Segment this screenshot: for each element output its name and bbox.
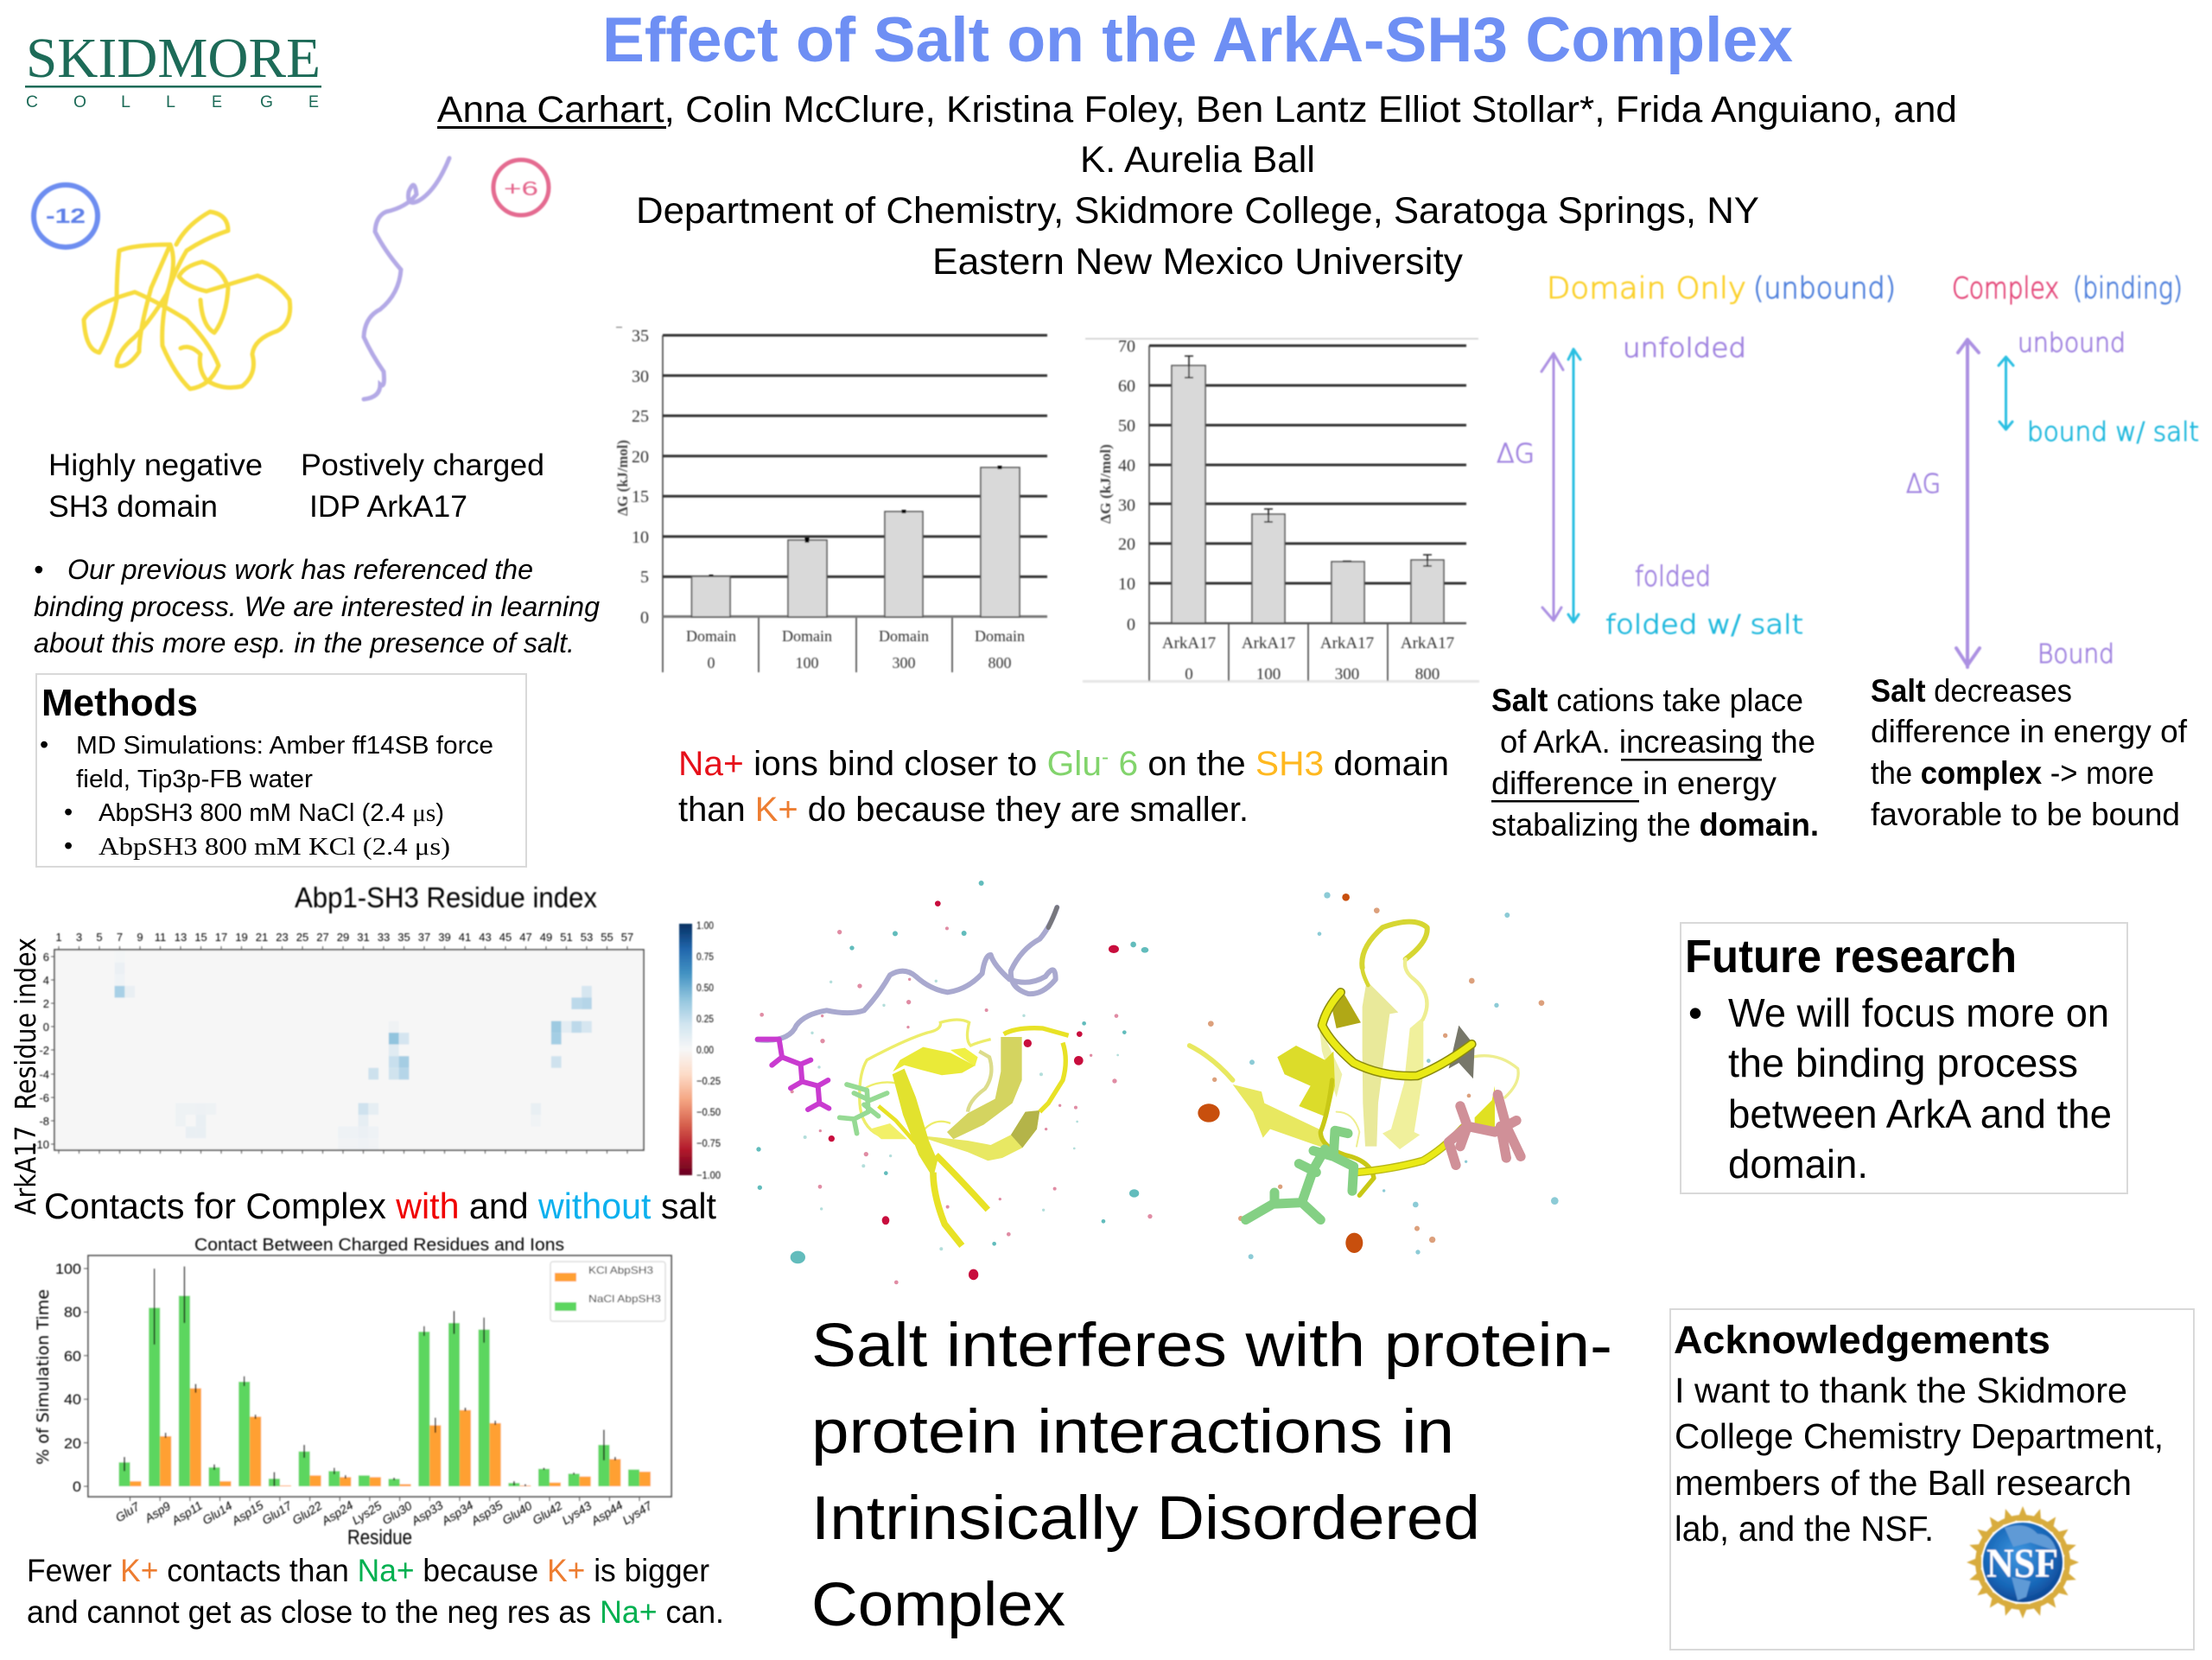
- x tick labels: Asp35: [467, 1498, 505, 1529]
- icon: -12 charge: [34, 185, 98, 247]
- heatmap x labels: 27: [316, 931, 329, 944]
- callout: take-home message: Complex: [811, 1571, 1065, 1639]
- heatmap x labels: 33: [378, 931, 390, 944]
- heatmap x labels: 37: [418, 931, 430, 944]
- x tick labels: Lys47: [620, 1498, 655, 1527]
- future research text: the binding process: [1728, 1040, 2078, 1085]
- authors and affiliations: Department of Chemistry, Skidmore College, Saratoga Springs, NY: [636, 190, 1759, 232]
- colorbar: 0.00: [696, 1044, 714, 1056]
- ribbon: SH3 domain: [860, 1020, 1069, 1246]
- label: bound with salt: bound w/ salt: [2027, 417, 2199, 448]
- heading: methods: Methods: [41, 682, 198, 724]
- arrow: delta G complex: [1956, 340, 1980, 667]
- x labels: 300: [892, 654, 916, 671]
- y tick labels: 50: [1118, 417, 1135, 436]
- callout: take-home message: protein interactions in: [811, 1398, 1454, 1466]
- x labels: ArkA17: [1401, 634, 1454, 652]
- heading: complex: [1952, 271, 2183, 306]
- y tick labels: 25: [632, 407, 649, 426]
- logo: Skidmore College: O: [73, 93, 86, 111]
- x labels: ArkA17: [1242, 634, 1295, 652]
- x labels: ArkA17: [1320, 634, 1374, 652]
- intro text: •: [34, 554, 43, 585]
- heatmap x labels: 19: [235, 931, 248, 944]
- heatmap x labels: 43: [479, 931, 492, 944]
- x labels: 800: [988, 654, 1011, 671]
- acknowledgements text: lab, and the NSF.: [1675, 1509, 1934, 1549]
- heatmap y labels: [33, 951, 49, 1151]
- diagram: complex energy: [1906, 271, 2199, 670]
- protein render: NaCl complex: [756, 881, 1153, 1284]
- text: salt domain: difference in energy: [1491, 766, 1777, 801]
- heatmap x labels: 9: [137, 931, 143, 944]
- label: bound: Bound: [2037, 639, 2114, 670]
- x tick labels: Glu22: [289, 1498, 325, 1527]
- protein render: KCl complex: [1190, 892, 1559, 1259]
- x labels: Domain: [879, 627, 929, 645]
- text: salt complex: the complex -> more: [1871, 755, 2154, 791]
- methods list: •: [64, 798, 73, 826]
- colorbar: 0.75: [696, 951, 714, 963]
- x tick labels: Glu30: [379, 1498, 415, 1527]
- heatmap x labels: 49: [540, 931, 552, 944]
- x labels: 0: [707, 654, 715, 671]
- x tick labels: Asp24: [318, 1498, 356, 1529]
- heatmap y labels: 2: [43, 997, 49, 1010]
- heatmap: contact map: [33, 881, 644, 1154]
- text: ion binding: 6: [1109, 745, 1138, 783]
- label: SH3 domain: [48, 448, 263, 524]
- methods list: AbpSH3 800 mM NaCl (2.4 μs): [99, 799, 444, 827]
- colorbar: −0.50: [696, 1106, 721, 1118]
- colorbar: −0.75: [696, 1137, 721, 1149]
- x labels: 0: [1185, 665, 1193, 684]
- colorbar: −0.25: [696, 1075, 721, 1087]
- colorbar: [679, 919, 721, 1181]
- logo: Skidmore College: SKIDMORE: [26, 27, 321, 90]
- label: folded: folded: [1635, 560, 1711, 593]
- sticks: green residue: [840, 1084, 887, 1134]
- heatmap x labels: 55: [601, 931, 613, 944]
- x tick labels: Glu14: [200, 1498, 235, 1527]
- bars: [1172, 366, 1444, 623]
- label: ArkA17 IDP: [301, 448, 544, 524]
- diagram: domain only energy: [1497, 271, 1896, 640]
- methods list: field, Tip3p-FB water: [76, 766, 313, 793]
- intro text: binding process. We are interested in learning: [34, 591, 600, 622]
- x tick labels: Asp9: [142, 1498, 173, 1526]
- heatmap x labels: 1: [55, 931, 62, 944]
- future research text: We will focus more on: [1728, 990, 2109, 1035]
- text: salt complex: [1871, 673, 2188, 832]
- y tick labels: 15: [632, 487, 649, 506]
- icon: +6 charge: [493, 160, 549, 215]
- text: ion binding: [678, 745, 1449, 829]
- y tick labels: 80: [64, 1304, 81, 1320]
- heading: domain only: Domain Only: [1547, 271, 1746, 306]
- y tick labels: 20: [632, 448, 649, 467]
- heading: future research: Future research: [1685, 931, 2017, 983]
- heatmap x labels: 3: [76, 931, 82, 944]
- methods list: MD Simulations: Amber ff14SB force: [76, 732, 493, 760]
- acknowledgements text: [1675, 1371, 2164, 1549]
- label: unbound: unbound: [2018, 328, 2126, 359]
- future research text: domain.: [1728, 1142, 1868, 1186]
- heatmap y labels: -4: [39, 1068, 49, 1081]
- y tick labels: 70: [1118, 337, 1135, 356]
- callout: take-home message: Intrinsically Disordered: [811, 1485, 1480, 1553]
- y tick labels: 20: [64, 1435, 81, 1452]
- heading: acknowledgements: Acknowledgements: [1674, 1318, 2050, 1362]
- heatmap x labels: 25: [296, 931, 308, 944]
- squiggle: yellow SH3: [84, 212, 290, 389]
- heatmap x labels: 23: [276, 931, 289, 944]
- x tick labels: Lys43: [559, 1498, 594, 1527]
- x labels: Domain: [686, 627, 736, 645]
- x axis title: Residue: [347, 1526, 412, 1549]
- logo: Skidmore College: L: [121, 93, 130, 111]
- arrow: delta G complex with salt: [1999, 357, 2013, 429]
- panel: methods: [36, 674, 526, 867]
- squiggle: purple ArkA17: [364, 158, 449, 399]
- y axis title: ΔG (kJ/mol): [1097, 444, 1114, 524]
- y tick labels: 40: [1118, 456, 1135, 475]
- heatmap x labels: 57: [621, 931, 633, 944]
- bar chart: contacts between residues and ions: [34, 1236, 671, 1549]
- intro text: Our previous work has referenced the: [67, 554, 533, 585]
- x tick labels: Asp34: [438, 1498, 476, 1529]
- heatmap y labels: 6: [43, 951, 49, 964]
- intro text: about this more esp. in the presence of salt.: [34, 627, 575, 658]
- y tick labels: 10: [1118, 575, 1135, 594]
- caption: contacts: Contacts for Complex with and without salt: [44, 1186, 716, 1226]
- arrow: delta G domain: [1541, 353, 1563, 620]
- heatmap x labels: 45: [499, 931, 512, 944]
- x tick labels: Lys25: [349, 1498, 385, 1527]
- future research text: •: [1688, 990, 1702, 1035]
- legend: NaCl AbpSH3: [588, 1293, 661, 1305]
- text: salt complex: Salt decreases: [1871, 673, 2072, 709]
- heatmap x labels: 51: [560, 931, 573, 944]
- heatmap y labels: -8: [39, 1115, 49, 1128]
- logo: Skidmore College: L: [166, 93, 175, 111]
- x tick labels: Glu17: [259, 1498, 295, 1527]
- heatmap x labels: 15: [194, 931, 207, 944]
- x labels: 100: [1256, 665, 1281, 684]
- heatmap x labels: 13: [175, 931, 187, 944]
- heatmap y labels: -2: [39, 1044, 49, 1057]
- heatmap x labels: [55, 931, 633, 944]
- acknowledgements text: members of the Ball research: [1675, 1463, 2132, 1503]
- caption: fewer K+ contacts: Fewer K+ contacts than Na+ because K+ is bigger: [27, 1553, 709, 1588]
- methods list: •: [64, 832, 73, 860]
- x labels: 300: [1335, 665, 1359, 684]
- heatmap x labels: 11: [155, 931, 166, 944]
- text: salt domain: Salt cations take place: [1491, 683, 1803, 718]
- legend: KCl AbpSH3: [588, 1264, 653, 1276]
- y tick labels: 30: [632, 367, 649, 386]
- x labels: [686, 627, 1025, 671]
- text: ion binding: -: [1102, 746, 1109, 769]
- intro text: [34, 554, 600, 658]
- heading: domain only: (unbound): [1753, 271, 1896, 306]
- methods list: [40, 731, 493, 861]
- caption: fewer K+ contacts: [27, 1553, 724, 1630]
- bars: NaCl: [119, 1296, 639, 1486]
- chart title: Contact Between Charged Residues and Ions: [194, 1236, 564, 1255]
- heatmap x labels: 5: [96, 931, 103, 944]
- legend: [550, 1262, 665, 1321]
- y axis title: ΔG (kJ/mol): [614, 440, 631, 516]
- x tick labels: Asp33: [408, 1498, 446, 1529]
- future research text: between ArkA and the: [1728, 1091, 2112, 1136]
- y tick labels: 30: [1118, 496, 1135, 515]
- y tick labels: [632, 327, 649, 627]
- y tick labels: 60: [64, 1348, 81, 1364]
- heading: complex: (binding): [2073, 271, 2183, 306]
- authors and affiliations: K. Aurelia Ball: [1080, 139, 1315, 181]
- panel: acknowledgements: [1670, 1309, 2194, 1650]
- y tick labels: 20: [1118, 535, 1135, 554]
- acknowledgements text: I want to thank the Skidmore: [1675, 1371, 2127, 1410]
- sticks: green residue: [1246, 1130, 1354, 1220]
- heatmap x labels: 35: [397, 931, 410, 944]
- methods list: AbpSH3 800 mM KCl (2.4 μs): [99, 833, 450, 861]
- illustration: SH3 domain: [34, 158, 549, 399]
- heatmap title: Abp1-SH3 Residue index: [295, 881, 597, 913]
- bars: [691, 467, 1020, 617]
- heatmap x labels: 53: [581, 931, 593, 944]
- heatmap x labels: 31: [357, 931, 370, 944]
- label: ArkA17 IDP: IDP ArkA17: [309, 490, 467, 524]
- icon: +6 charge: +6: [504, 177, 538, 200]
- ribbon: ArkA17 peptide: [758, 907, 1057, 1040]
- title: Effect of Salt on the ArkA-SH3 Complex: [602, 5, 1793, 75]
- label: SH3 domain: Highly negative: [48, 448, 263, 482]
- y tick labels: 5: [640, 568, 649, 587]
- icon: NSF logo: [1967, 1506, 2079, 1619]
- x tick labels: Glu7: [113, 1498, 143, 1524]
- heatmap x labels: 39: [438, 931, 451, 944]
- text: salt complex: favorable to be bound: [1871, 797, 2180, 832]
- y tick labels: 0: [1127, 615, 1135, 634]
- chart: domain delta G: [614, 327, 1047, 672]
- label: SH3 domain: SH3 domain: [48, 490, 218, 524]
- logo: Skidmore College: E: [212, 93, 222, 111]
- y tick labels: 10: [632, 528, 649, 547]
- heatmap y labels: -10: [33, 1138, 49, 1151]
- panel: future research: [1681, 923, 2127, 1193]
- text: ion binding: on the SH3 domain: [1147, 745, 1446, 783]
- authors and affiliations: [437, 89, 1957, 283]
- y tick labels: [1118, 337, 1135, 634]
- text: salt domain: [1491, 683, 1819, 843]
- heatmap x labels: 47: [519, 931, 532, 944]
- authors and affiliations: Eastern New Mexico University: [932, 241, 1464, 283]
- caption: fewer K+ contacts: and cannot get as close to the neg res as Na+ can.: [27, 1594, 724, 1630]
- x labels: ArkA17: [1162, 634, 1216, 652]
- heatmap y axis title: ArkA17 Residue index: [9, 938, 42, 1215]
- x labels: [1162, 634, 1454, 684]
- x tick labels: Asp44: [588, 1498, 626, 1529]
- callout: take-home message: [811, 1312, 1612, 1639]
- heatmap cells: [115, 951, 592, 1150]
- heading: complex: Complex: [1952, 271, 2059, 306]
- colorbar: 0.50: [696, 982, 714, 994]
- x tick labels: [113, 1498, 655, 1529]
- label: unfolded: unfolded: [1623, 334, 1746, 364]
- icon: -12 charge: -12: [46, 205, 86, 228]
- methods list: •: [40, 731, 48, 759]
- colorbar: 1.00: [696, 919, 714, 932]
- y tick labels: 100: [55, 1261, 81, 1277]
- y tick labels: 35: [632, 327, 649, 346]
- x tick labels: Asp15: [228, 1498, 266, 1529]
- heatmap y labels: 0: [43, 1021, 49, 1034]
- sticks: pink residue: [1449, 1095, 1521, 1165]
- chart: ArkA17 delta G: [1083, 337, 1479, 684]
- label: folded with salt: folded w/ salt: [1605, 610, 1803, 640]
- heatmap y labels: -6: [39, 1091, 49, 1104]
- x tick labels: Glu40: [499, 1498, 535, 1527]
- icon: NSF logo: NSF: [1986, 1541, 2058, 1587]
- heatmap y labels: 4: [43, 974, 49, 987]
- ions: [1198, 892, 1559, 1259]
- logo: Skidmore College: G: [260, 93, 273, 111]
- label: delta G: ΔG: [1497, 439, 1535, 469]
- y tick labels: 40: [64, 1391, 81, 1408]
- heatmap x labels: 17: [215, 931, 227, 944]
- y tick labels: 0: [640, 608, 649, 627]
- y axis title: % of Simulation Time: [34, 1289, 53, 1465]
- heatmap x labels: 29: [337, 931, 349, 944]
- heatmap x labels: 41: [459, 931, 471, 944]
- x tick labels: Asp11: [168, 1498, 205, 1528]
- colorbar: 0.25: [696, 1013, 714, 1025]
- ions: [756, 881, 1153, 1284]
- authors and affiliations: Anna Carhart, Colin McClure, Kristina Foley, Ben Lantz Elliot Stollar*, Frida Anguiano, and: [437, 89, 1957, 130]
- heading: domain only: [1547, 271, 1896, 306]
- ribbon: SH3 domain: [1190, 922, 1518, 1195]
- y tick labels: 60: [1118, 377, 1135, 396]
- text: salt domain: of ArkA. increasing the: [1500, 724, 1815, 760]
- text: ion binding: than K+ do because they are smaller.: [678, 791, 1249, 829]
- text: salt complex: difference in energy of: [1871, 714, 2188, 749]
- callout: take-home message: Salt interferes with protein-: [811, 1312, 1612, 1380]
- x labels: Domain: [975, 627, 1025, 645]
- future research text: [1688, 990, 2112, 1186]
- heatmap x labels: 7: [117, 931, 123, 944]
- x labels: 100: [795, 654, 819, 671]
- colorbar: −1.00: [696, 1169, 721, 1181]
- label: delta G: ΔG: [1906, 469, 1941, 499]
- text: salt domain: stabalizing the domain.: [1491, 807, 1819, 843]
- arrow: delta G domain with salt: [1568, 349, 1580, 622]
- logo: Skidmore College: C: [26, 93, 38, 111]
- logo: Skidmore College: E: [308, 93, 319, 111]
- text: ion binding: Na+ ions bind closer to Glu: [678, 745, 1101, 783]
- label: ArkA17 IDP: Postively charged: [301, 448, 544, 482]
- y tick labels: [55, 1261, 81, 1495]
- x labels: Domain: [782, 627, 832, 645]
- heatmap x labels: 21: [256, 931, 268, 944]
- x tick labels: Glu42: [530, 1498, 565, 1527]
- acknowledgements text: College Chemistry Department,: [1675, 1416, 2164, 1456]
- y tick labels: 0: [73, 1479, 81, 1495]
- sticks: magenta residue: [758, 1040, 829, 1110]
- x labels: 800: [1415, 665, 1440, 684]
- bars: KCl: [130, 1389, 651, 1486]
